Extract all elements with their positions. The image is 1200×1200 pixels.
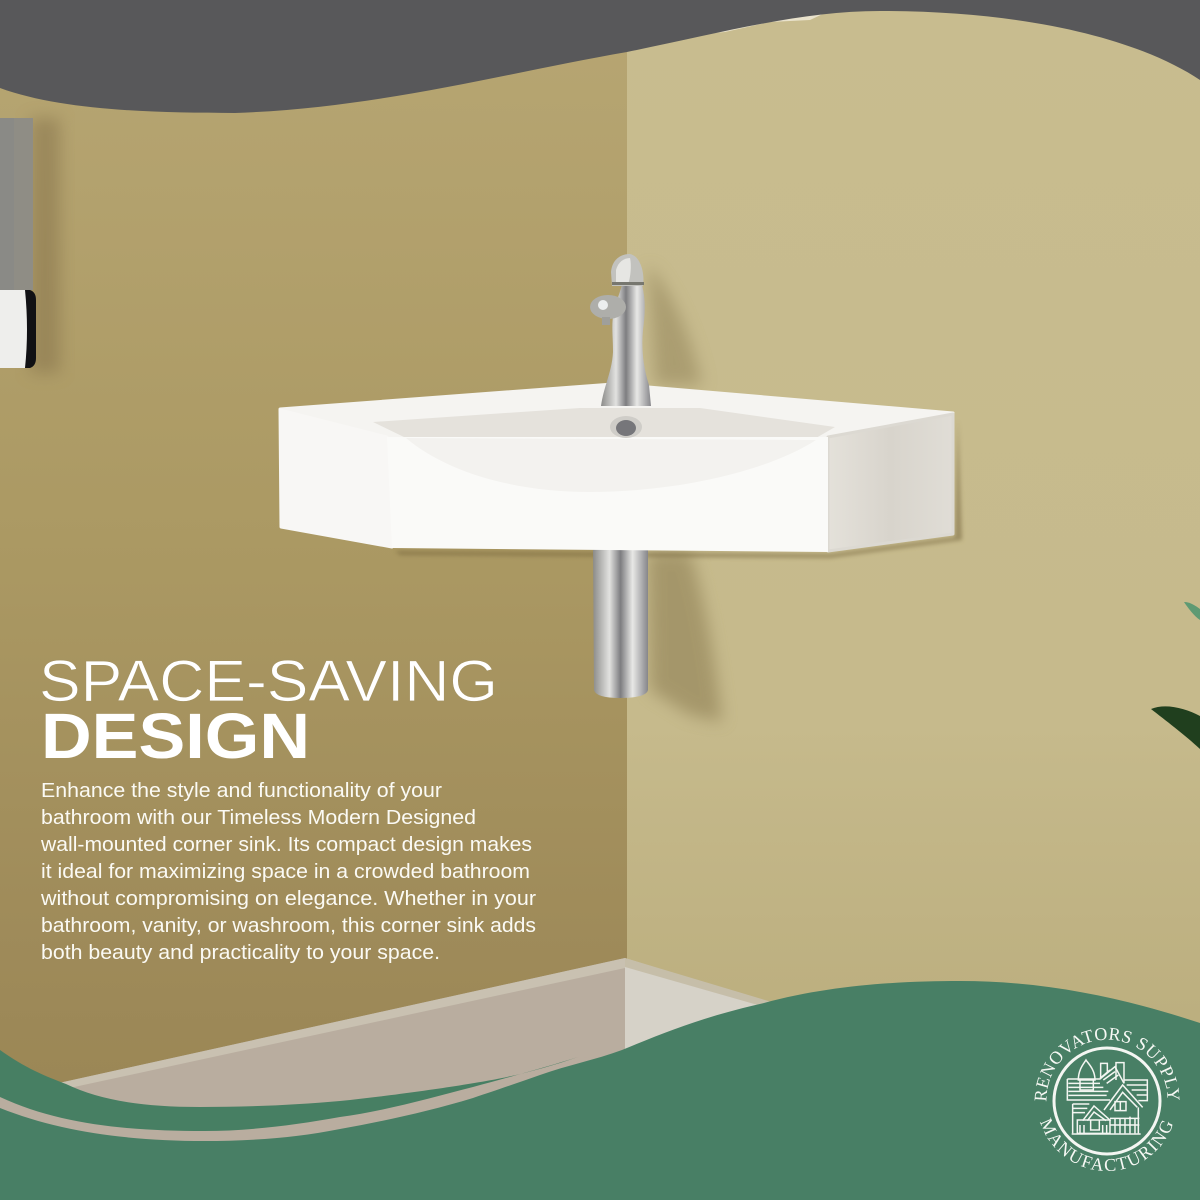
body text: Enhance the style and functionality of your [41, 779, 442, 802]
body text: wall-mounted corner sink. Its compact design makes [40, 833, 532, 856]
sink right panel [828, 414, 953, 551]
logo ring [1054, 1048, 1160, 1154]
sink top rim [280, 384, 953, 437]
wall dispenser [0, 118, 60, 373]
body text: bathroom, vanity, or washroom, this corner sink adds [41, 914, 536, 937]
green swoosh [0, 1050, 578, 1131]
faucet and pipe shadows [395, 265, 962, 722]
logo top text: RENOVATORS SUPPLY [1034, 1028, 1180, 1102]
sink basin curve [406, 438, 816, 492]
body text: bathroom with our Timeless Modern Designed [41, 806, 476, 829]
logo bottom text: MANUFACTURING [1040, 1117, 1172, 1171]
heading line 1: SPACE-SAVING [39, 649, 498, 714]
heading [39, 649, 498, 772]
body text: without compromising on elegance. Whether in your [40, 887, 536, 910]
taupe band below swoosh [0, 1057, 640, 1160]
body text: it ideal for maximizing space in a crowded bathroom [41, 860, 530, 883]
top grey wave [0, 0, 1200, 113]
body text [40, 779, 536, 964]
overflow hole [610, 416, 642, 438]
cream sliver [704, 12, 827, 34]
baseboard [0, 958, 790, 1200]
sink basin [373, 408, 835, 438]
body text: both beauty and practicality to your space. [41, 941, 440, 964]
corner sink [280, 384, 953, 552]
left wall [0, 0, 628, 1200]
drain pipe [593, 548, 648, 698]
bottom green wave [0, 981, 1200, 1200]
sink left panel [280, 410, 392, 547]
logo house [1067, 1060, 1147, 1134]
logo [1034, 1028, 1180, 1171]
faucet [590, 254, 651, 406]
heading line 2: DESIGN [41, 700, 310, 772]
sink front face [387, 437, 828, 552]
right wall [627, 0, 1200, 1200]
plant leaves [1151, 602, 1200, 749]
